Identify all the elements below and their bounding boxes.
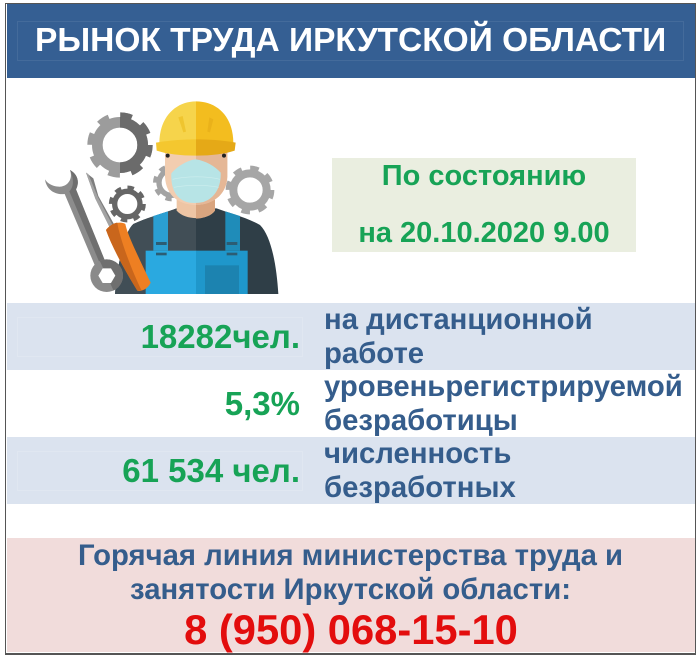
icon: gear behind head <box>156 167 188 199</box>
icon: screwdriver <box>86 173 151 291</box>
neck <box>177 197 215 218</box>
icon: small gear <box>111 188 143 220</box>
label: remote work <box>324 303 593 370</box>
header banner <box>7 4 695 78</box>
panel: date box <box>332 158 636 252</box>
value: unemployed count: 61 534 чел. <box>122 452 300 489</box>
title: РЫНОК ТРУДА ИРКУТСКОЙ ОБЛАСТИ <box>35 22 666 59</box>
head <box>165 148 227 205</box>
row 3 background: unemployed <box>7 437 695 504</box>
hotline text <box>78 539 623 606</box>
icon: right gear <box>229 169 271 211</box>
label: unemployed: безработных <box>324 471 516 504</box>
date line 1: По состоянию <box>382 160 586 192</box>
label: unemployed: численность <box>324 437 511 470</box>
overall straps <box>153 211 168 251</box>
face mask <box>171 159 221 203</box>
panel: hotline <box>7 538 695 652</box>
date line 2: на 20.10.2020 9.00 <box>358 217 610 249</box>
hotline phone: 8 (950) 068-15-10 <box>184 606 518 653</box>
hard hat <box>156 101 236 156</box>
value: remote workers: 18282чел. <box>141 318 300 355</box>
label: unemployment rate <box>324 370 683 437</box>
worker body <box>115 197 278 294</box>
row 2: unemployment rate <box>225 370 683 437</box>
hotline text: Горячая линия министерства труда и <box>78 539 623 572</box>
row 1 background: remote work <box>7 303 695 370</box>
label: unemployed <box>324 437 516 504</box>
illustration: worker with tools <box>45 101 278 294</box>
icon: wrench <box>45 170 128 292</box>
icon: large gear <box>92 117 148 173</box>
overall bib <box>146 251 196 294</box>
label: unemployment rate: уровеньрегистрируемой <box>324 370 683 403</box>
label: remote work: на дистанционной <box>324 303 593 336</box>
label: remote work: работе <box>324 337 424 370</box>
value: unemployment rate: 5,3% <box>225 385 300 422</box>
hotline text: занятости Иркутской области: <box>130 573 571 606</box>
label: unemployment rate: безработицы <box>324 404 518 437</box>
